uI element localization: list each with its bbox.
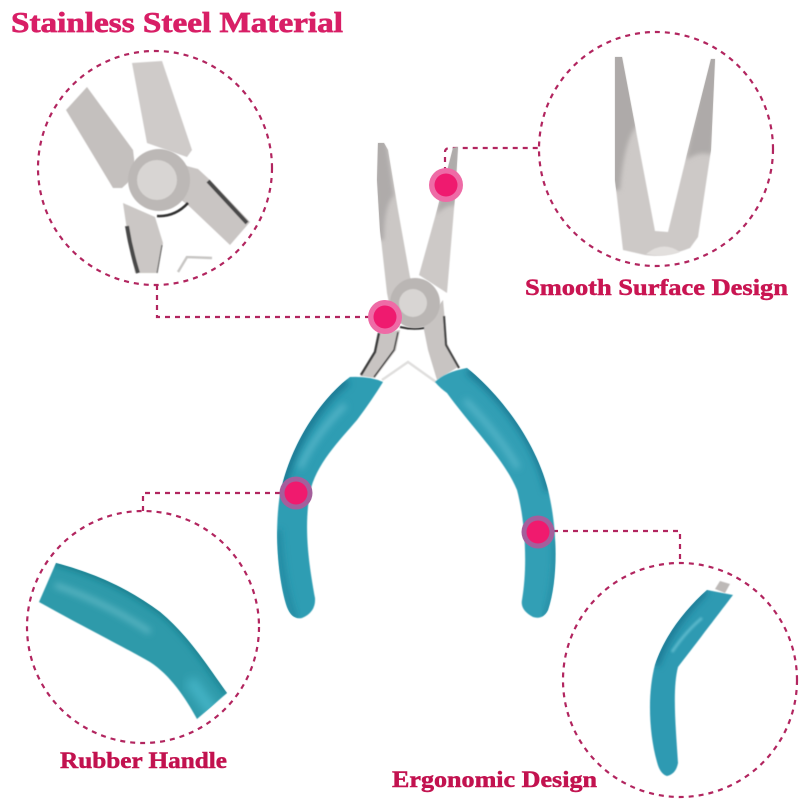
panel: ergonomic detail circle xyxy=(563,563,797,797)
jaw shading xyxy=(615,57,715,192)
right lower arm xyxy=(423,300,459,380)
connector: ergonomic xyxy=(553,531,680,563)
panel: stainless steel detail circle xyxy=(38,51,272,285)
hotspot: pivot xyxy=(368,300,402,334)
label: Ergonomic Design: Ergonomic Design xyxy=(392,767,597,792)
connector: stainless steel xyxy=(157,285,370,317)
illustration: main pliers xyxy=(277,140,556,620)
connector: rubber handle xyxy=(143,493,280,511)
title: Stainless Steel Material: Stainless Steel Material xyxy=(11,7,343,39)
panel: rubber handle detail circle xyxy=(27,511,259,743)
pivot segment xyxy=(646,246,680,256)
left handle xyxy=(277,377,383,620)
metal stub xyxy=(715,581,730,593)
upper right jaw xyxy=(132,61,192,157)
hotspot: jaw tip xyxy=(429,168,463,202)
right handle xyxy=(435,368,556,620)
upper left jaw xyxy=(66,87,136,188)
hotspot: left handle xyxy=(280,476,312,510)
spring wire xyxy=(382,362,436,382)
hotspot: right handle xyxy=(522,516,554,548)
right lower arm xyxy=(175,165,250,245)
label: Smooth Surface Design: Smooth Surface Design xyxy=(525,275,788,300)
right jaw xyxy=(419,145,460,293)
left lower arm xyxy=(360,327,424,378)
small spring wire xyxy=(178,257,212,272)
connector: smooth surface xyxy=(445,148,541,172)
label: Rubber Handle: Rubber Handle xyxy=(60,748,227,773)
jaws xyxy=(615,57,715,256)
handle segment xyxy=(39,558,232,719)
left lower arm xyxy=(123,203,188,273)
left jaw xyxy=(376,142,411,301)
pivot xyxy=(128,149,190,211)
handle xyxy=(650,590,733,776)
panel: smooth surface detail circle xyxy=(539,32,773,266)
pivot xyxy=(390,278,440,328)
